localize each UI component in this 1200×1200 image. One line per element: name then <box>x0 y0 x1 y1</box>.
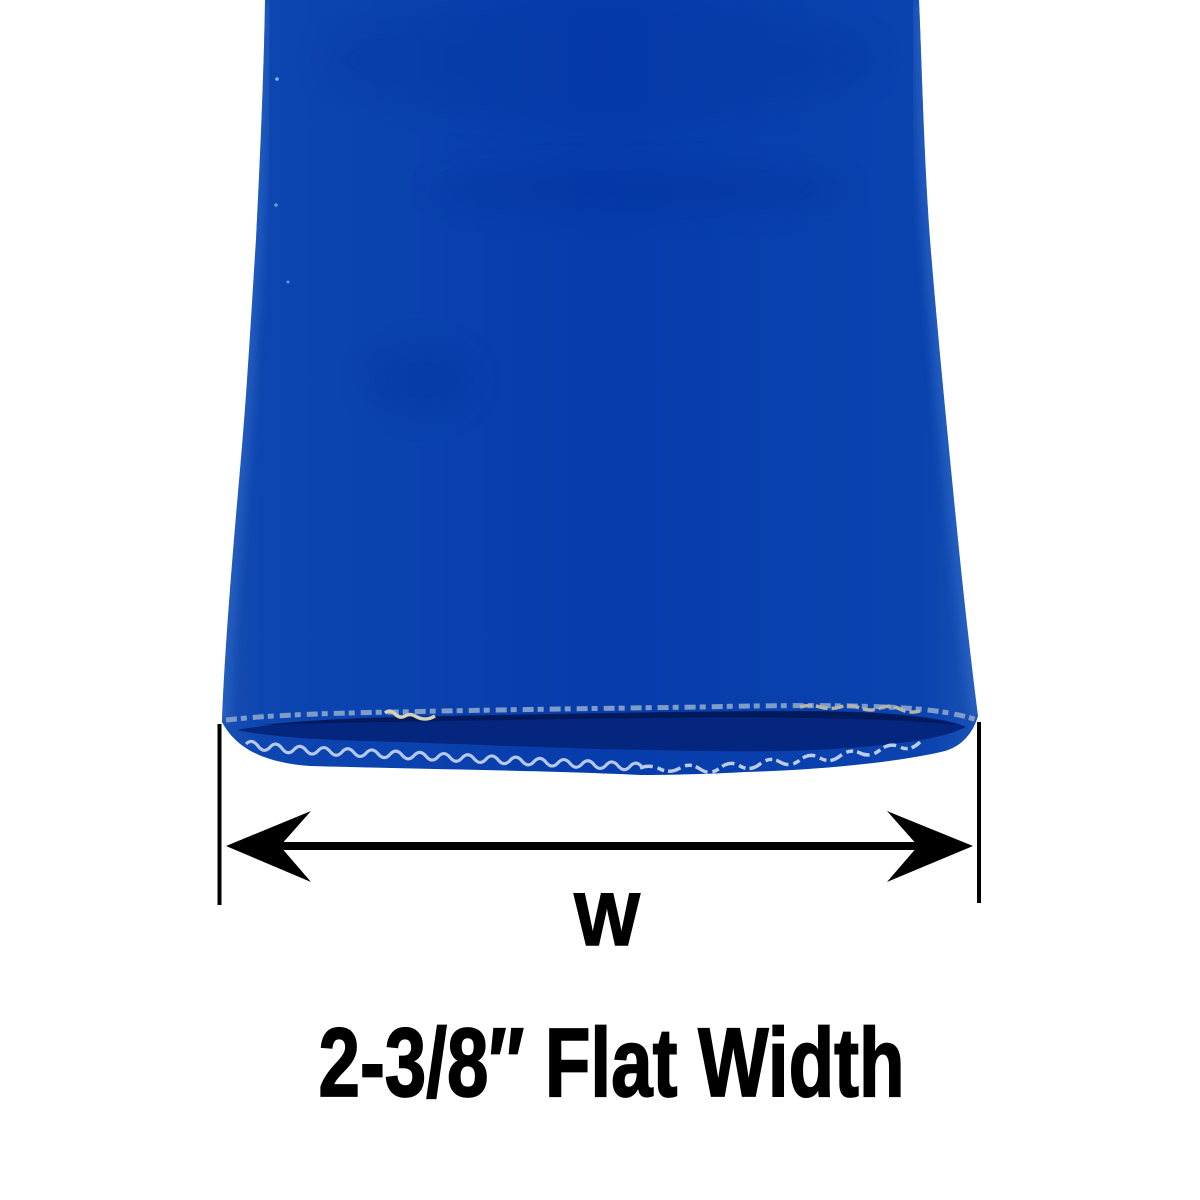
seam: inner wavy bead <box>246 741 642 770</box>
dimension line: left extent tick <box>218 724 222 905</box>
label: W: W <box>574 878 640 961</box>
caption: flat width: 2-3/8″ Flat Width <box>318 1008 904 1117</box>
arrow: flat width double arrow <box>226 811 973 882</box>
hose opening <box>226 706 977 772</box>
upper lip seam <box>226 706 977 720</box>
seam: right beaded section <box>640 742 920 772</box>
upper lip worn section <box>385 711 435 719</box>
upper lip worn right section <box>800 706 920 712</box>
dimension line: right extent tick <box>977 722 981 903</box>
hose body <box>222 0 978 775</box>
